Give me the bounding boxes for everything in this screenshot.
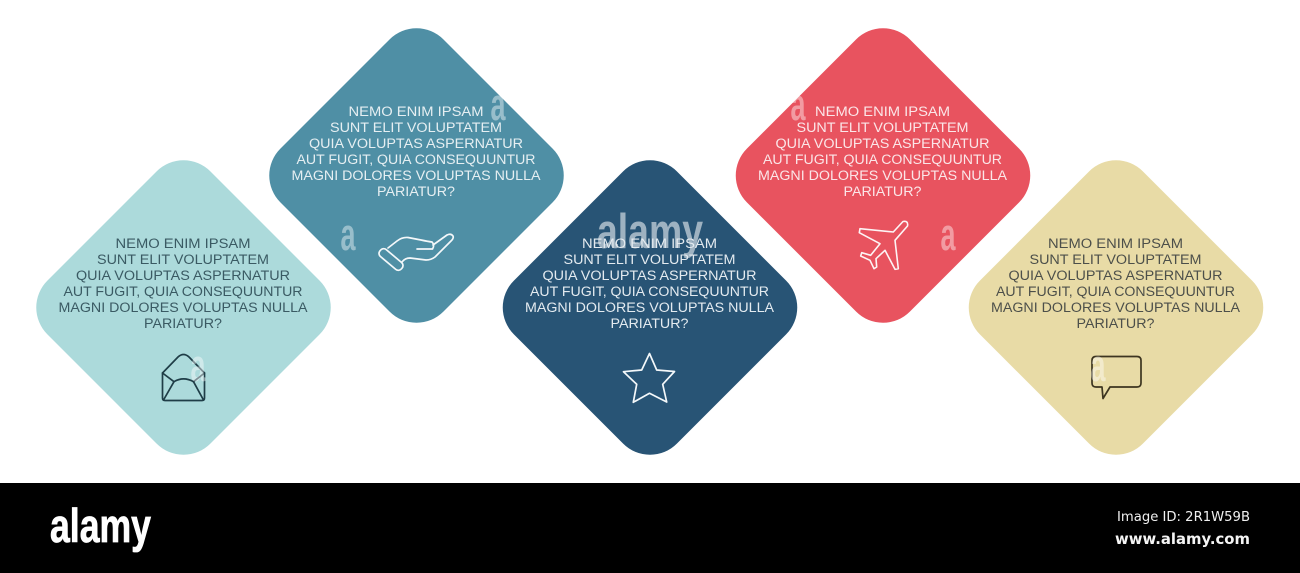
text: sand panel: NEMO ENIM IPSAM xyxy=(1048,236,1183,252)
text: mid teal panel: SUNT ELIT VOLUPTATEM xyxy=(330,120,502,136)
text: red panel: PARIATUR? xyxy=(844,184,922,200)
text: sand panel: PARIATUR? xyxy=(1076,316,1155,332)
text: light teal panel: MAGNI DOLORES VOLUPTAS NULLA xyxy=(58,300,308,316)
text: navy panel: QUIA VOLUPTAS ASPERNATUR xyxy=(542,268,756,284)
text: red panel: QUIA VOLUPTAS ASPERNATUR xyxy=(776,136,990,152)
watermark: small a marks: a xyxy=(490,79,506,130)
text: red panel: SUNT ELIT VOLUPTATEM xyxy=(796,120,968,136)
text: navy panel xyxy=(525,236,775,332)
text: red panel xyxy=(758,104,1008,200)
watermark: alamy centre: alamy xyxy=(597,205,703,259)
panel: light teal diamond xyxy=(21,145,346,470)
watermark: small a marks: a xyxy=(1090,340,1106,391)
text: red panel: AUT FUGIT, QUIA CONSEQUUNTUR xyxy=(763,152,1002,168)
text: light teal panel: QUIA VOLUPTAS ASPERNATUR xyxy=(76,268,290,284)
panel: red diamond xyxy=(720,13,1046,338)
footer logo: alamy: alamy xyxy=(50,499,151,552)
watermark: small a marks: a xyxy=(940,209,956,260)
text: light teal panel xyxy=(58,236,308,332)
panel: sand diamond xyxy=(953,145,1279,470)
text: sand panel: MAGNI DOLORES VOLUPTAS NULLA xyxy=(991,300,1241,316)
text: sand panel xyxy=(991,236,1241,332)
icon: open hand xyxy=(377,234,453,272)
watermark: small a marks: a xyxy=(190,340,206,391)
text: light teal panel: NEMO ENIM IPSAM xyxy=(116,236,250,252)
text: navy panel: SUNT ELIT VOLUPTATEM xyxy=(564,252,736,268)
text: red panel: MAGNI DOLORES VOLUPTAS NULLA xyxy=(758,168,1008,184)
text: sand panel: AUT FUGIT, QUIA CONSEQUUNTUR xyxy=(996,284,1235,300)
text: mid teal panel: QUIA VOLUPTAS ASPERNATUR xyxy=(309,136,523,152)
icon: open envelope xyxy=(162,354,204,400)
footer band xyxy=(0,483,1300,573)
text: navy panel: AUT FUGIT, QUIA CONSEQUUNTUR xyxy=(530,284,769,300)
text: red panel: NEMO ENIM IPSAM xyxy=(815,104,950,120)
footer: image id: Image ID: 2R1W59B xyxy=(1117,509,1250,525)
text: mid teal panel: NEMO ENIM IPSAM xyxy=(348,104,484,120)
text: navy panel: MAGNI DOLORES VOLUPTAS NULLA xyxy=(525,300,775,316)
panel: mid teal diamond xyxy=(254,13,579,338)
panel: navy diamond xyxy=(487,145,813,470)
text: sand panel: SUNT ELIT VOLUPTATEM xyxy=(1030,252,1202,268)
icon: speech bubble xyxy=(1092,356,1141,398)
icon: star xyxy=(624,354,674,402)
text: mid teal panel xyxy=(292,104,541,200)
icon: airplane xyxy=(859,221,908,269)
text: mid teal panel: MAGNI DOLORES VOLUPTAS NULLA xyxy=(292,168,541,184)
watermark: small a marks xyxy=(190,79,1106,391)
text: navy panel: PARIATUR? xyxy=(610,316,689,332)
watermark: small a marks: a xyxy=(790,79,806,130)
text: sand panel: QUIA VOLUPTAS ASPERNATUR xyxy=(1008,268,1222,284)
text: light teal panel: PARIATUR? xyxy=(144,316,222,332)
text: navy panel: NEMO ENIM IPSAM xyxy=(582,236,717,252)
text: mid teal panel: PARIATUR? xyxy=(377,184,455,200)
text: light teal panel: SUNT ELIT VOLUPTATEM xyxy=(97,252,269,268)
footer: website: www.alamy.com xyxy=(1115,530,1250,548)
text: mid teal panel: AUT FUGIT, QUIA CONSEQUUNTUR xyxy=(296,152,536,168)
text: light teal panel: AUT FUGIT, QUIA CONSEQUUNTUR xyxy=(64,284,302,300)
watermark: small a marks: a xyxy=(340,209,356,260)
